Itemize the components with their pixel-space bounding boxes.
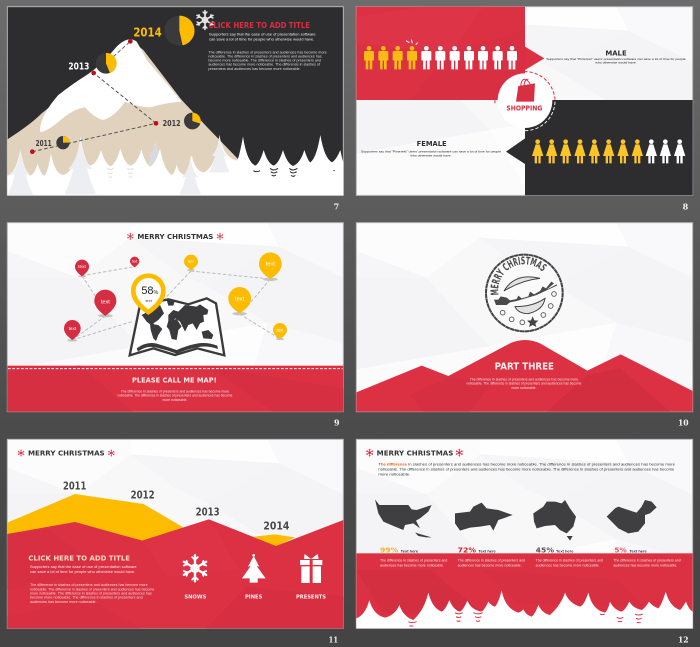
- tree line: [7, 135, 343, 195]
- column text: audiences has become more noticeable.: [536, 563, 600, 567]
- tree line: [356, 591, 693, 628]
- page number 7: 7: [334, 202, 339, 212]
- male text: who otherwise would have.: [595, 61, 637, 65]
- year labels: [63, 479, 290, 532]
- pie 2012: [184, 113, 201, 129]
- text here labels: [401, 549, 648, 554]
- body text: [208, 32, 327, 71]
- male text: Supporters say that "Pinterest" users' presentation software can save a lot of time for people: [546, 57, 686, 61]
- mountain snow cap: [40, 39, 182, 132]
- text here labels: Text here: [401, 549, 419, 554]
- female text: Supporters say that "Pinterest" users' presentation software can save a lot of time for people: [361, 150, 501, 154]
- shopping badge: SHOPPING: [506, 104, 542, 112]
- red pins: [64, 257, 139, 340]
- icon labels: PINES: [245, 594, 263, 600]
- icon: folded world map: [130, 298, 224, 355]
- red male panel: [356, 7, 544, 100]
- column text: The difference in slashes of presenters and: [458, 559, 525, 563]
- body text: can save a lot of time for people who otherwise would have.: [30, 570, 135, 574]
- female text: FEMALE: [417, 139, 447, 148]
- callout pin 58%: text: [145, 298, 153, 303]
- year labels: 2013: [68, 61, 89, 72]
- column text: The difference in slashes of presenters and: [380, 559, 447, 563]
- heading: CLICK HERE TO ADD TITLE: [208, 21, 310, 30]
- body text: Supporters say that the ease of use of presentation software: [209, 32, 316, 36]
- map: China: [607, 500, 657, 533]
- pin labels: text: [69, 326, 77, 331]
- map: Australia: [533, 500, 576, 541]
- pin shadows: [67, 269, 284, 342]
- female text: [361, 139, 501, 157]
- text here labels: Text here: [629, 549, 648, 554]
- year labels: 2011: [63, 479, 86, 492]
- stamp: merry christmas: [485, 254, 564, 332]
- map: USA: [375, 499, 432, 537]
- body text: noticeable. The difference in slashes of presenters and audiences has: [208, 54, 322, 58]
- body text: more noticeable. The difference in slashes of presenters and audiences has: [30, 591, 152, 595]
- panel: slide 7 mountain timeline: [7, 7, 343, 212]
- red footer band: [7, 366, 343, 412]
- column text: audiences has become more noticeable.: [380, 563, 444, 567]
- dark female panel: [506, 100, 693, 195]
- year labels: 2011: [36, 139, 52, 148]
- red mountains: [356, 340, 693, 412]
- subtext: noticeable. The difference in slashes of presenters and audiences has become: [466, 382, 582, 386]
- column text: audiences has become more noticeable.: [458, 563, 522, 567]
- grey tree: [145, 138, 165, 171]
- male text: [546, 48, 686, 65]
- panel: slide 9 world map: [7, 223, 343, 428]
- icon: gift box: [300, 554, 322, 583]
- body text: noticeable. The difference in slashes of presenters and audiences has become: [30, 587, 154, 591]
- footer text: noticeable. The difference in slashes of presenters and audiences has become: [117, 394, 233, 398]
- page number 8: 8: [683, 202, 689, 212]
- column text: [380, 559, 681, 567]
- map: Russia: [455, 503, 513, 531]
- mountain rock: [7, 39, 238, 187]
- red band: [356, 553, 693, 628]
- subtext: The difference in slashes of presenters and audiences has become more: [470, 377, 578, 381]
- percent labels: [380, 546, 627, 554]
- shaded trees: [8, 135, 229, 195]
- year labels: 2014: [133, 26, 162, 40]
- panel: slide 12 countries: [356, 439, 693, 644]
- panel: slide 10 part three: [356, 222, 694, 428]
- body text: The difference in slashes of presenters and audiences has become more: [30, 583, 148, 587]
- page number 10: 10: [678, 418, 689, 428]
- trunk stripes: [408, 613, 643, 626]
- trunk gaps: [107, 168, 335, 177]
- icon: snowflake: [184, 555, 206, 581]
- footer text: [117, 390, 233, 402]
- pin labels: text: [132, 259, 137, 263]
- icon: pine tree: [242, 554, 266, 583]
- shopping badge: [495, 72, 555, 131]
- pin labels: text: [188, 258, 195, 263]
- page number 11: 11: [329, 634, 338, 644]
- body text: become more noticeable. The difference in slashes of presenters and: [208, 59, 321, 63]
- intro text: more noticeable.: [378, 472, 410, 476]
- heading: CLICK HERE TO ADD TITLE: [28, 555, 130, 563]
- year labels: 2012: [131, 488, 155, 501]
- subtext: more noticeable.: [511, 386, 537, 390]
- slide title: MERRY CHRISTMAS: [137, 232, 213, 241]
- slide title: MERRY CHRISTMAS: [28, 450, 105, 458]
- icon labels: [184, 594, 326, 600]
- pie 2014: [164, 16, 195, 46]
- body text: presenters and audiences has become more noticeable.: [208, 67, 301, 71]
- pin labels: text: [266, 262, 275, 268]
- column text: The difference in slashes of presenters and: [613, 559, 681, 563]
- footer text: The difference in slashes of presenters and audiences has become more: [121, 390, 229, 394]
- yellow ridge: [7, 494, 295, 547]
- year labels: 2012: [163, 118, 181, 128]
- intro text: noticeable. The difference in slashes of presenters and audiences has become more noticeable. The difference in slashes of presenters and audiences has become: [378, 468, 674, 472]
- icon: snowflake: [197, 11, 213, 29]
- pie 2011: [56, 136, 70, 149]
- page number 12: 12: [678, 634, 689, 644]
- year labels: 2014: [263, 519, 290, 532]
- percent labels: 5%: [614, 546, 627, 554]
- timeline dashed lines: [32, 41, 156, 152]
- body text: The difference in slashes of presenters and audiences has become more: [208, 50, 327, 54]
- footer text: more noticeable.: [162, 398, 188, 402]
- male pictogram row: [364, 40, 517, 69]
- percent labels: 72%: [458, 546, 476, 554]
- heading: PART THREE: [495, 361, 554, 372]
- intro text: [378, 463, 675, 476]
- subtext: [466, 377, 582, 390]
- pin labels: text: [235, 297, 245, 303]
- female pictogram row: [532, 139, 685, 163]
- callout pin 58%: 58%: [141, 285, 159, 297]
- body text: become more noticeable. The difference in slashes of presenters and: [30, 596, 143, 600]
- year labels: 2013: [196, 506, 220, 519]
- pin labels: text: [78, 264, 86, 269]
- body text: Supporters say that the ease of use of presentation software: [30, 565, 137, 569]
- icon labels: SNOWS: [184, 594, 207, 600]
- intro text: The difference in slashes of presenters and audiences has become more noticeable. The difference in slashes of presenters and audiences has become more: [378, 463, 675, 467]
- slide title: MERRY CHRISTMAS: [377, 448, 453, 457]
- panel: slide 11 yearly ridges: [7, 439, 343, 644]
- body text: audiences has become more noticeable.: [30, 600, 97, 604]
- body text: audiences has become more noticeable. The difference in slashes of: [208, 63, 320, 67]
- male text: MALE: [605, 48, 627, 57]
- callout pin 58%: [131, 273, 166, 315]
- column text: The difference in slashes of presenters and: [536, 559, 603, 563]
- timeline points: [30, 39, 158, 154]
- red ridge: [7, 519, 343, 628]
- female text: who otherwise would have.: [410, 153, 452, 157]
- pie 2013: [96, 53, 117, 74]
- percent labels: 99%: [380, 546, 398, 554]
- yellow pins: [184, 252, 287, 339]
- page number 9: 9: [334, 418, 340, 428]
- text here labels: Text here: [478, 549, 497, 554]
- footer heading: PLEASE CALL ME MAP!: [132, 377, 217, 385]
- column text: audiences has become more noticeable.: [613, 563, 677, 567]
- body text: [30, 565, 154, 604]
- pin labels: [69, 258, 284, 332]
- pin labels: text: [277, 327, 284, 332]
- percent labels: 45%: [536, 546, 554, 554]
- panel: slide 8 male and female shopping: [356, 7, 693, 212]
- year labels: [36, 26, 181, 148]
- dashed connectors: [72, 267, 280, 340]
- text here labels: Text here: [556, 549, 574, 554]
- body text: can save a lot of time for people who otherwise would have.: [209, 37, 314, 41]
- pin labels: text: [101, 299, 110, 305]
- icon labels: PRESENTS: [296, 594, 326, 600]
- stamp: merry christmas: MERRY CHRISTMAS: [490, 256, 547, 295]
